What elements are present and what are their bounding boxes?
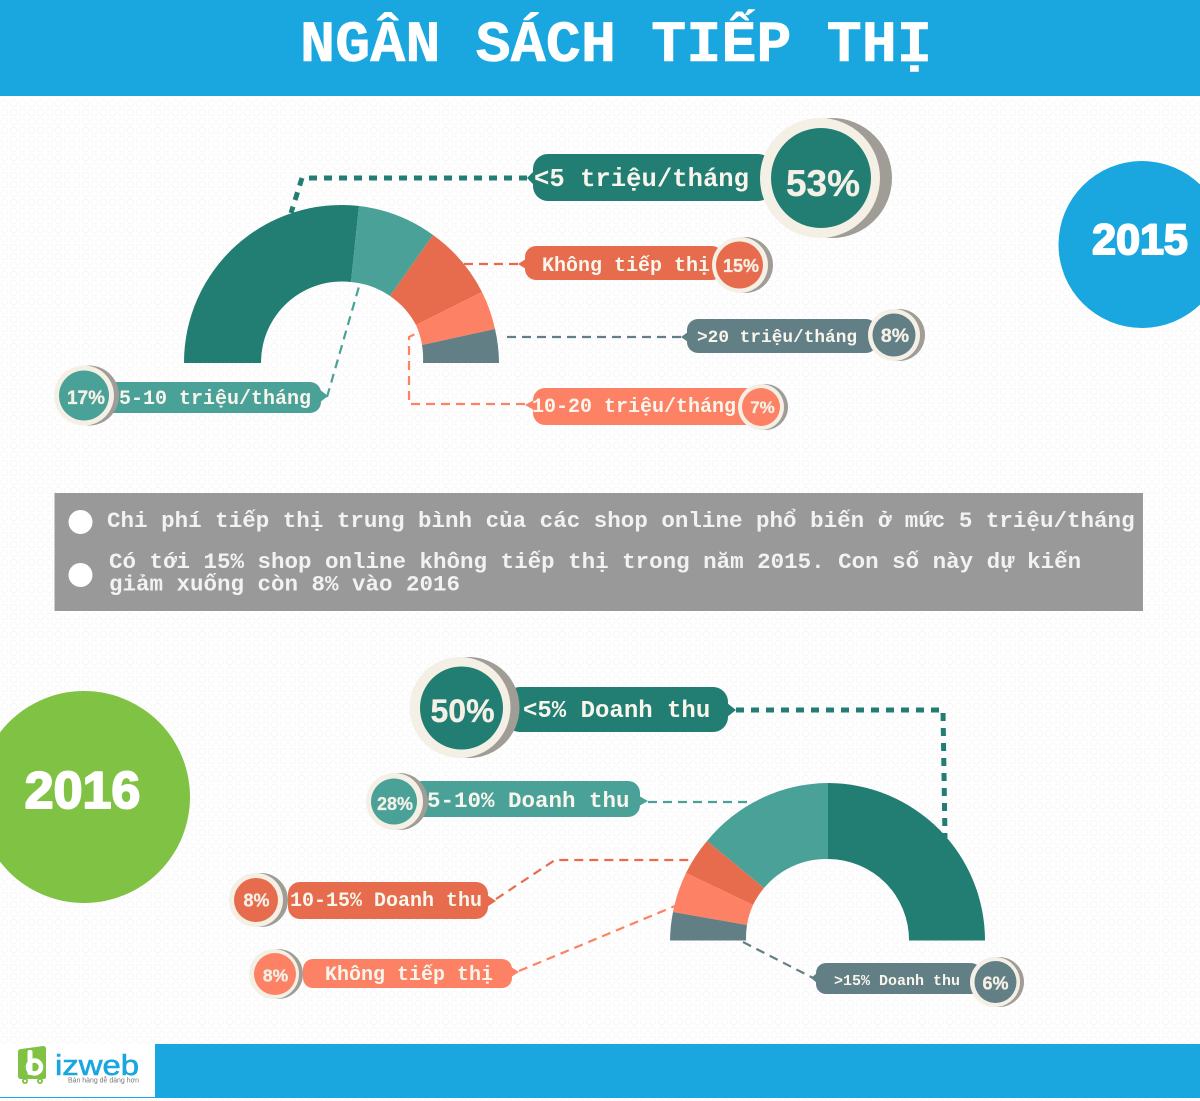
- callout: under 5 percent revenue 50%: <5% Doanh thu: [523, 698, 710, 725]
- connector: 5-10 million: [327, 283, 360, 397]
- panel: 2015 chart and callouts: [54, 118, 925, 430]
- bullet two: [68, 563, 92, 587]
- year badge 2015: [1058, 161, 1200, 328]
- callout: 5-10 million 17%: 17%: [67, 388, 105, 409]
- takeaway two text: Có tới 15% shop online không tiếp thị trong năm 2015. Con số này dự kiến: [109, 549, 1081, 575]
- logo: bizweb: [18, 1046, 139, 1084]
- header band with title: [0, 0, 1200, 96]
- callout: over 15 percent revenue 6%: >15% Doanh thu: [834, 973, 960, 990]
- connector: over 20 million: [504, 336, 681, 338]
- title: NGÂN SÁCH TIẾP THỊ: [300, 9, 932, 79]
- connector: 5-10 percent revenue: [648, 801, 748, 803]
- callout: under 5 million 53%: 53%: [786, 163, 860, 204]
- callout: no marketing 8%: [249, 949, 519, 999]
- callout: over 20 million 8%: [681, 309, 925, 361]
- panel: key takeaways: [54, 493, 1143, 611]
- connector: over 15 percent revenue: [743, 942, 815, 979]
- callout: no marketing 15%: 15%: [723, 256, 759, 276]
- callout: 10-20 million 7%: 10-20 triệu/tháng: [532, 396, 736, 419]
- callout: under 5 million 53%: [527, 118, 892, 238]
- year badge 2016: [0, 691, 190, 903]
- connector: no marketing 2016: [519, 906, 675, 971]
- logo tagline: Bán hàng dễ dàng hơn: [68, 1076, 139, 1084]
- connector: 10-20 million: [409, 333, 525, 404]
- callout: no marketing 8%: 8%: [263, 966, 289, 986]
- callout: 5-10 percent revenue 28%: 5-10% Doanh thu: [427, 788, 630, 814]
- connector: under 5 percent revenue: [736, 710, 945, 838]
- callout: 5-10 million 17%: [54, 366, 328, 426]
- callout: under 5 percent revenue 50%: 50%: [430, 693, 495, 729]
- callout: no marketing 15%: [518, 237, 773, 293]
- callout: no marketing 15%: Không tiếp thị: [542, 255, 710, 278]
- connector: under 5 million: [291, 178, 527, 213]
- connector: 10-15 percent revenue: [496, 860, 693, 899]
- donut chart 2015: [184, 205, 499, 363]
- connector: no marketing 2015: [463, 263, 518, 265]
- callout: 5-10 percent revenue 28%: [366, 773, 648, 830]
- callout: over 20 million 8%: 8%: [881, 325, 909, 347]
- callout: 10-20 million 7%: [525, 384, 788, 430]
- bullet one: [68, 510, 92, 534]
- callout: 10-15 percent revenue 8%: 8%: [243, 890, 270, 910]
- callout: over 15 percent revenue 6%: 6%: [982, 974, 1009, 994]
- callout: 10-15 percent revenue 8%: [229, 873, 496, 927]
- icon: green shopping cart: [18, 1046, 46, 1084]
- donut chart 2016: [670, 783, 985, 940]
- logo wordmark: izweb: [55, 1050, 139, 1082]
- callout: no marketing 8%: Không tiếp thị: [325, 964, 493, 987]
- callout: under 5 percent revenue 50%: [410, 657, 736, 758]
- year badge 2016: 2016: [25, 762, 140, 820]
- year badge 2015: 2015: [1092, 216, 1188, 264]
- callout: over 20 million 8%: >20 triệu/tháng: [697, 328, 857, 348]
- callout: 10-15 percent revenue 8%: 10-15% Doanh thu: [290, 890, 482, 913]
- callout: 10-20 million 7%: 7%: [750, 398, 775, 417]
- callout: over 15 percent revenue 6%: [811, 957, 1024, 1007]
- takeaway one text: Chi phí tiếp thị trung bình của các shop online phổ biến ở mức 5 triệu/tháng: [107, 508, 1135, 534]
- callout: 5-10 million 17%: 5-10 triệu/tháng: [119, 388, 311, 411]
- footer band: [0, 1044, 1200, 1098]
- panel: 2016 chart and callouts: [229, 657, 1024, 1007]
- callout: 5-10 percent revenue 28%: 28%: [377, 794, 413, 814]
- takeaway two text: giảm xuống còn 8% vào 2016: [109, 572, 460, 598]
- callout: under 5 million 53%: <5 triệu/tháng: [534, 165, 749, 194]
